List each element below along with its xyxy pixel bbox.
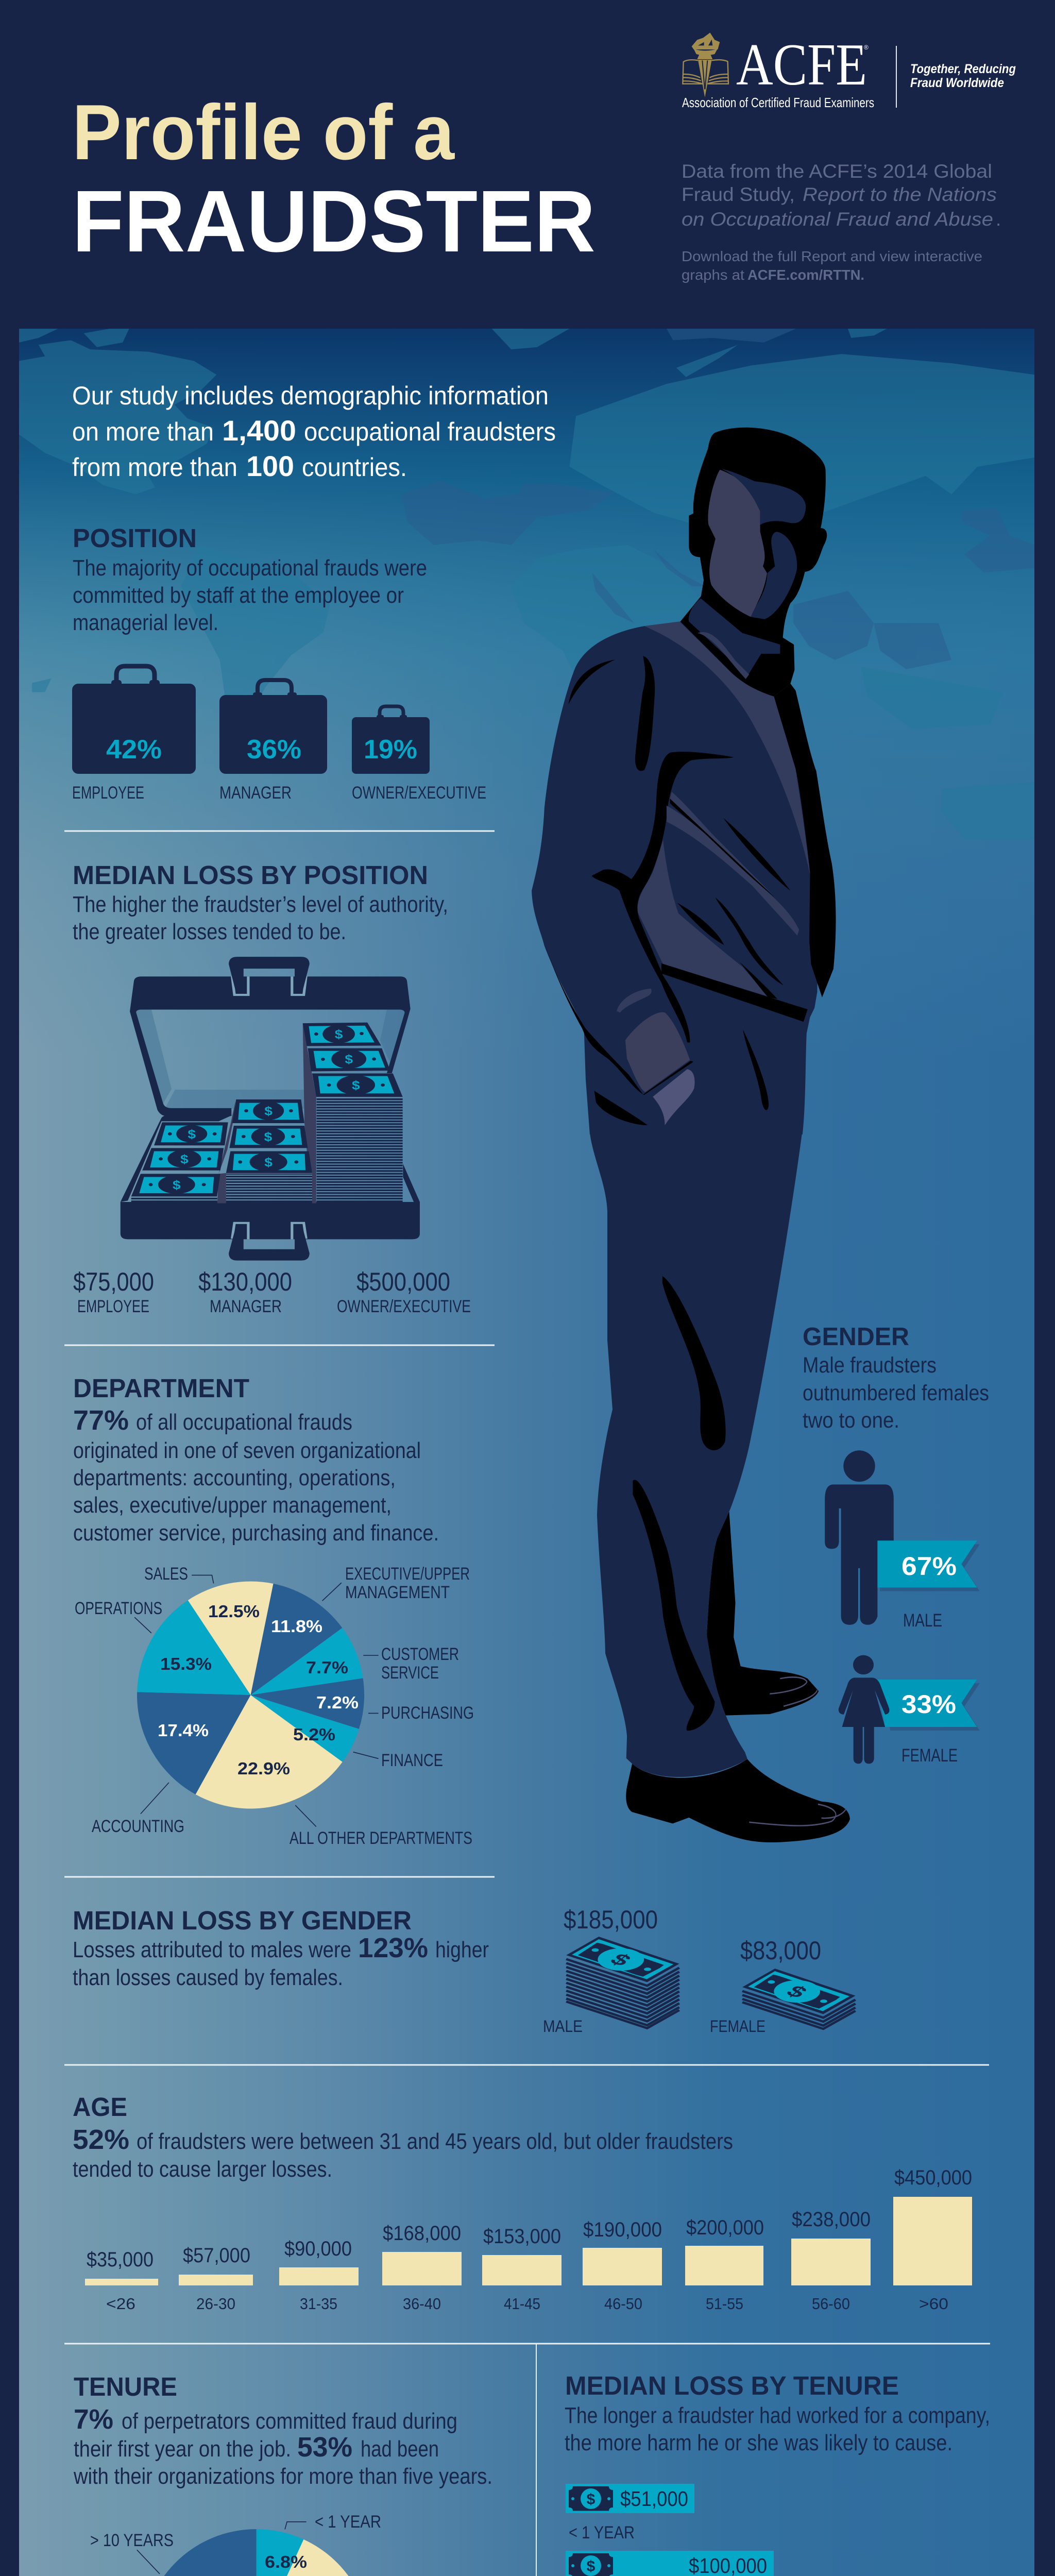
intro statement: countries. (302, 453, 407, 482)
front shoe (626, 1759, 850, 1842)
pie labels: department: SERVICE (381, 1663, 439, 1683)
body text: higher (435, 1937, 489, 1962)
panel: gender (803, 1323, 989, 1766)
pie leader lines: tenure (120, 2522, 387, 2576)
download note: graphs at (682, 267, 744, 283)
icon: manager briefcase 36%: 36% (247, 735, 301, 765)
bar chart: median loss by age: $90,000 (284, 2238, 352, 2260)
title: Profile of a: Profile of a (72, 89, 455, 176)
bar chart: median loss by age: 51-55 (706, 2295, 743, 2313)
pie chart: department (137, 1581, 364, 1809)
pie chart: tenure: 6.8% (265, 2552, 307, 2571)
study source text: Data from the ACFE’s 2014 Global (682, 161, 992, 182)
body text: 123% (358, 1933, 428, 1963)
figure: fraudster man, upper body (532, 428, 836, 1134)
intro statement: from more than (72, 453, 237, 482)
bar chart: median loss by age: $153,000 (483, 2225, 561, 2248)
figure: fraudster man, legs and shoes (590, 1132, 850, 1842)
bar chart: median loss by age: <26 (106, 2295, 135, 2313)
amount: male: $185,000 (564, 1905, 658, 1934)
bar chart: median loss by age: $200,000 (686, 2216, 764, 2239)
heading: GENDER (803, 1323, 909, 1351)
icon: male figure with 67% ribbon: 67% (901, 1552, 957, 1581)
panel: median loss by position (73, 860, 471, 1316)
study source text (682, 161, 1001, 230)
panel: tenure (73, 2372, 492, 2576)
bar: less than 1 year: $ (587, 2491, 595, 2508)
body text: The longer a fraudster had worked for a company, (565, 2403, 990, 2428)
intro statement: Our study includes demographic information (72, 381, 549, 410)
label: female: FEMALE (710, 2017, 765, 2036)
logo caption: Association of Certified Fraud Examiners (682, 95, 874, 110)
body text: of fraudsters were between 31 and 45 years old, but older fraudsters (137, 2129, 733, 2154)
icon: employee briefcase 42%: 42% (106, 735, 162, 765)
icon: manager briefcase 36% (219, 680, 327, 774)
icon: male figure with 67% ribbon (825, 1450, 980, 1631)
body text (73, 555, 427, 635)
body text: Male fraudsters (803, 1353, 937, 1378)
briefcase labels: MANAGER (219, 783, 292, 803)
shirt cuff (617, 989, 652, 1012)
bar: less than 1 year: < 1 YEAR (569, 2523, 635, 2543)
amounts by position: $75,000 (73, 1267, 154, 1296)
registered mark: ® (864, 44, 869, 51)
body text: than losses caused by females. (73, 1965, 343, 1990)
body text: managerial level. (73, 610, 218, 635)
pie labels: department: CUSTOMER (381, 1645, 459, 1664)
pie labels: department: FINANCE (381, 1751, 443, 1770)
body text (73, 1933, 489, 1990)
amount: female: $83,000 (740, 1936, 821, 1965)
bar chart: median loss by age: 26-30 (196, 2295, 235, 2313)
logo wordmark: ACFE (736, 32, 867, 97)
pie chart: department: 5.2% (293, 1725, 335, 1744)
pie chart: department: 17.4% (158, 1721, 209, 1740)
bill stack: employee (131, 1122, 228, 1196)
panel: age (73, 2092, 972, 2313)
shirt strip (644, 621, 810, 874)
bar chart: median loss by age: 36-40 (403, 2295, 441, 2313)
bar chart: median loss by age: $450,000 (894, 2166, 972, 2189)
pie chart: department: 15.3% (160, 1654, 212, 1673)
pie labels: department: MANAGEMENT (345, 1583, 450, 1602)
icon: owner briefcase 19% (352, 706, 430, 774)
icon: male money stack (566, 1937, 679, 2028)
bar chart: median loss by age: >60 (919, 2295, 948, 2313)
bar chart: median loss by age: $238,000 (792, 2208, 871, 2231)
body text: sales, executive/upper management, (73, 1493, 392, 1518)
pie labels: department (75, 1564, 474, 1848)
study source text: . (996, 209, 1001, 230)
body text: had been (361, 2436, 439, 2462)
tagline: Together, Reducing (910, 62, 1016, 76)
pie labels: tenure (90, 2512, 462, 2576)
heading: POSITION (73, 523, 197, 553)
panel: median loss by gender (73, 1905, 856, 2036)
bill stack: manager: $ (264, 1130, 273, 1144)
body text: originated in one of seven organizational (73, 1438, 421, 1463)
body text: outnumbered females (803, 1381, 989, 1405)
bill stack: manager (226, 1099, 312, 1173)
bar chart: median loss by age: 41-45 (504, 2295, 540, 2313)
heading: MEDIAN LOSS BY POSITION (73, 860, 428, 890)
pie chart: tenure (142, 2529, 370, 2576)
icon: female figure with 33% ribbon (839, 1655, 980, 1766)
label: male: MALE (543, 2017, 583, 2036)
bar chart: median loss by age: $168,000 (383, 2222, 461, 2245)
pie labels: department: ALL OTHER DEPARTMENTS (290, 1828, 472, 1848)
body text (803, 1353, 989, 1433)
panel: median loss by tenure (565, 2371, 990, 2576)
amounts by position: OWNER/EXECUTIVE (337, 1297, 471, 1316)
study source text: on Occupational Fraud and Abuse (682, 209, 993, 230)
panel: department (73, 1374, 474, 1848)
body text (73, 2404, 492, 2489)
bill stack: owner (303, 1023, 403, 1097)
intro statement (72, 381, 556, 482)
bill stack: manager: $ (264, 1155, 273, 1169)
bar chart: median loss by age: 56-60 (812, 2295, 850, 2313)
header (72, 32, 1016, 283)
face shade forehead (722, 469, 806, 525)
pie labels: department: OPERATIONS (75, 1599, 162, 1618)
body text: the greater losses tended to be. (73, 919, 346, 944)
shoe highlights (749, 1677, 846, 1826)
head and neck outline (680, 428, 827, 697)
bill stack: employee: $ (188, 1127, 196, 1141)
bar chart: median loss by age (85, 2166, 972, 2313)
bar chart: median loss by age: $190,000 (583, 2218, 662, 2241)
pie labels: department: EXECUTIVE/UPPER (345, 1564, 470, 1584)
bill stack: owner: $ (335, 1027, 343, 1041)
tagline (910, 62, 1016, 90)
panel: position (72, 523, 486, 803)
amounts by position: $500,000 (356, 1267, 450, 1296)
back leg and shoe (707, 1512, 819, 1716)
bar chart: median loss by age: $57,000 (183, 2244, 250, 2267)
pie chart: department: 22.9% (237, 1759, 290, 1778)
heading: DEPARTMENT (73, 1374, 249, 1403)
icon: female figure with 33% ribbon: FEMALE (901, 1745, 958, 1766)
hand in pocket (653, 1069, 695, 1125)
body text: with their organizations for more than five years. (73, 2464, 492, 2489)
heading: MEDIAN LOSS BY TENURE (565, 2371, 899, 2400)
collar (689, 599, 780, 679)
jacket fold lines (544, 656, 808, 1125)
pie chart: department: 12.5% (208, 1602, 260, 1621)
body text: Losses attributed to males were (73, 1937, 351, 1962)
body text: tended to cause larger losses. (73, 2157, 332, 2182)
body text: The majority of occupational frauds were (73, 555, 427, 581)
body text: of perpetrators committed fraud during (122, 2409, 457, 2434)
study source text: Fraud Study, (682, 184, 795, 205)
bar: less than 1 year (566, 2484, 694, 2543)
bill stack: owner: $ (345, 1052, 353, 1066)
suit jacket (532, 621, 818, 1134)
pie labels: department: ACCOUNTING (92, 1817, 184, 1836)
pie labels: department: PURCHASING (381, 1703, 474, 1723)
trouser fold lines (633, 1276, 726, 1731)
icon: female money stack (742, 1969, 856, 2029)
bar: 1 to 5 years (566, 2551, 774, 2576)
bill stack: employee: $ (173, 1178, 181, 1192)
body text: the more harm he or she was likely to cause. (565, 2430, 952, 2455)
tagline: Fraud Worldwide (910, 76, 1004, 90)
download note: Download the full Report and view interactive (682, 248, 982, 264)
bar chart: median loss by age: 46-50 (604, 2295, 642, 2313)
body text: committed by staff at the employee or (73, 583, 404, 608)
logo divider (896, 46, 897, 108)
amounts by position: EMPLOYEE (77, 1297, 149, 1316)
icon: open briefcase filled with money (121, 957, 420, 1261)
pie chart: department: 7.7% (306, 1658, 348, 1677)
briefcase labels: EMPLOYEE (72, 783, 144, 803)
pie labels: department: SALES (144, 1564, 188, 1584)
body text: customer service, purchasing and finance. (73, 1520, 439, 1546)
trousers (590, 1132, 802, 1777)
bar: less than 1 year: $51,000 (620, 2487, 688, 2511)
study source text: Report to the Nations (803, 184, 997, 205)
body text: their first year on the job. (74, 2436, 291, 2462)
icon: male figure with 67% ribbon: MALE (903, 1611, 942, 1631)
body text: departments: accounting, operations, (73, 1465, 396, 1490)
briefcase labels (72, 783, 486, 803)
bill stack: employee: $ (180, 1152, 189, 1166)
body text: 7% (74, 2404, 113, 2435)
pie chart: department: 7.2% (316, 1693, 359, 1712)
body text (73, 2124, 733, 2182)
heading: AGE (73, 2092, 127, 2122)
heading: MEDIAN LOSS BY GENDER (73, 1906, 412, 1935)
bar: 1 to 5 years: $ (587, 2558, 595, 2575)
body text: two to one. (803, 1408, 899, 1433)
bill stack: manager: $ (264, 1104, 273, 1118)
heading: TENURE (74, 2372, 177, 2401)
intro statement: occupational fraudsters (304, 417, 556, 446)
briefcase labels: OWNER/EXECUTIVE (352, 783, 486, 803)
amounts by position: MANAGER (210, 1297, 282, 1316)
pie leader lines: department (134, 1575, 379, 1827)
bill stack: owner: $ (352, 1078, 360, 1092)
bar chart: median loss by age: $35,000 (87, 2248, 154, 2271)
intro statement: on more than (72, 417, 214, 446)
title: FRAUDSTER: FRAUDSTER (72, 173, 595, 270)
intro statement: 100 (246, 450, 294, 482)
tie (774, 684, 836, 997)
download note (682, 248, 982, 283)
intro statement: 1,400 (222, 414, 296, 447)
face lit side (708, 470, 767, 617)
icon: owner briefcase 19%: 19% (364, 735, 417, 765)
bar chart: median loss by age: 31-35 (300, 2295, 337, 2313)
icon: female figure with 33% ribbon: 33% (901, 1690, 956, 1719)
pie labels: tenure: < 1 YEAR (315, 2512, 381, 2532)
pie chart: department: 11.8% (271, 1617, 322, 1636)
icon: ACFE torch and book logo (683, 32, 728, 97)
body text: 53% (297, 2432, 352, 2463)
body text: 52% (73, 2124, 129, 2155)
icon: male money stack: $ (605, 1950, 637, 1969)
amounts by position (73, 1267, 471, 1316)
body text: 77% (73, 1405, 129, 1436)
body text: of all occupational frauds (136, 1410, 352, 1435)
body text (73, 1405, 439, 1546)
download note: ACFE.com/RTTN. (747, 267, 864, 283)
body text (73, 892, 448, 944)
pie labels: tenure: > 10 YEARS (90, 2531, 174, 2550)
face shade cheek (751, 532, 797, 619)
icon: employee briefcase 42% (72, 666, 196, 774)
body text: The higher the fraudster’s level of authority, (73, 892, 448, 917)
icon: female money stack: $ (781, 1982, 812, 2001)
amounts by position: $130,000 (198, 1267, 292, 1296)
body text (565, 2403, 990, 2455)
